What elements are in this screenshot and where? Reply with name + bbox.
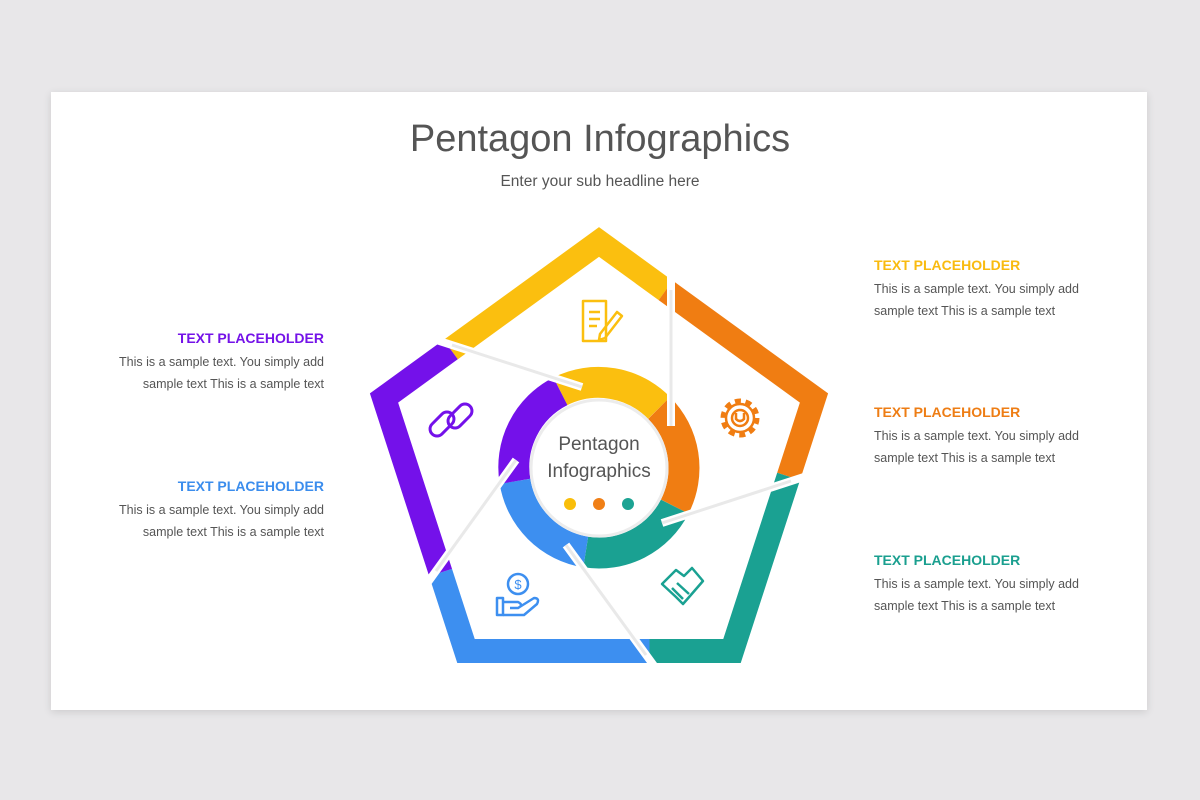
- text block: orange: This is a sample text. You simply add: [874, 429, 1079, 443]
- text block: blue: sample text This is a sample text: [143, 525, 324, 539]
- icon: document: [583, 301, 622, 341]
- text block: purple: [119, 330, 324, 391]
- text block: orange: [874, 404, 1079, 465]
- text block: teal: sample text This is a sample text: [874, 599, 1055, 613]
- inner ring: [514, 382, 684, 553]
- text block: yellow: This is a sample text. You simply add: [874, 282, 1079, 296]
- text block: yellow: [874, 257, 1079, 318]
- center circle: [531, 400, 667, 536]
- center circle: Pentagon: [558, 434, 640, 455]
- segment: purple: [384, 350, 451, 573]
- text block: blue: [119, 478, 324, 539]
- icon: handshake: [662, 568, 703, 604]
- text block: teal: TEXT PLACEHOLDER: [874, 552, 1020, 568]
- card: [51, 92, 1147, 710]
- text block: teal: This is a sample text. You simply add: [874, 577, 1079, 591]
- text block: purple: TEXT PLACEHOLDER: [178, 330, 324, 346]
- icon: hand with coin: [497, 574, 538, 615]
- icon: hand with coin: $: [514, 577, 522, 592]
- segment: yellow: [451, 242, 666, 350]
- text block: yellow: sample text This is a sample text: [874, 304, 1055, 318]
- subtitle: Enter your sub headline here: [500, 173, 700, 190]
- segment: blue: [441, 573, 650, 651]
- segment: orange: [666, 290, 814, 476]
- text block: orange: TEXT PLACEHOLDER: [874, 404, 1020, 420]
- text block: teal: [874, 552, 1079, 613]
- text block: orange: sample text This is a sample text: [874, 451, 1055, 465]
- text block: yellow: TEXT PLACEHOLDER: [874, 257, 1020, 273]
- text block: purple: sample text This is a sample text: [143, 377, 324, 391]
- text block: blue: TEXT PLACEHOLDER: [178, 478, 324, 494]
- separators: [423, 268, 813, 674]
- text block: blue: This is a sample text. You simply add: [119, 503, 324, 517]
- segment: teal: [650, 476, 789, 651]
- text block: purple: This is a sample text. You simply add: [119, 355, 324, 369]
- icon: gear: [723, 401, 757, 435]
- icon: chain link: [427, 401, 475, 439]
- title: Pentagon Infographics: [410, 118, 790, 160]
- center circle: Infographics: [547, 461, 651, 482]
